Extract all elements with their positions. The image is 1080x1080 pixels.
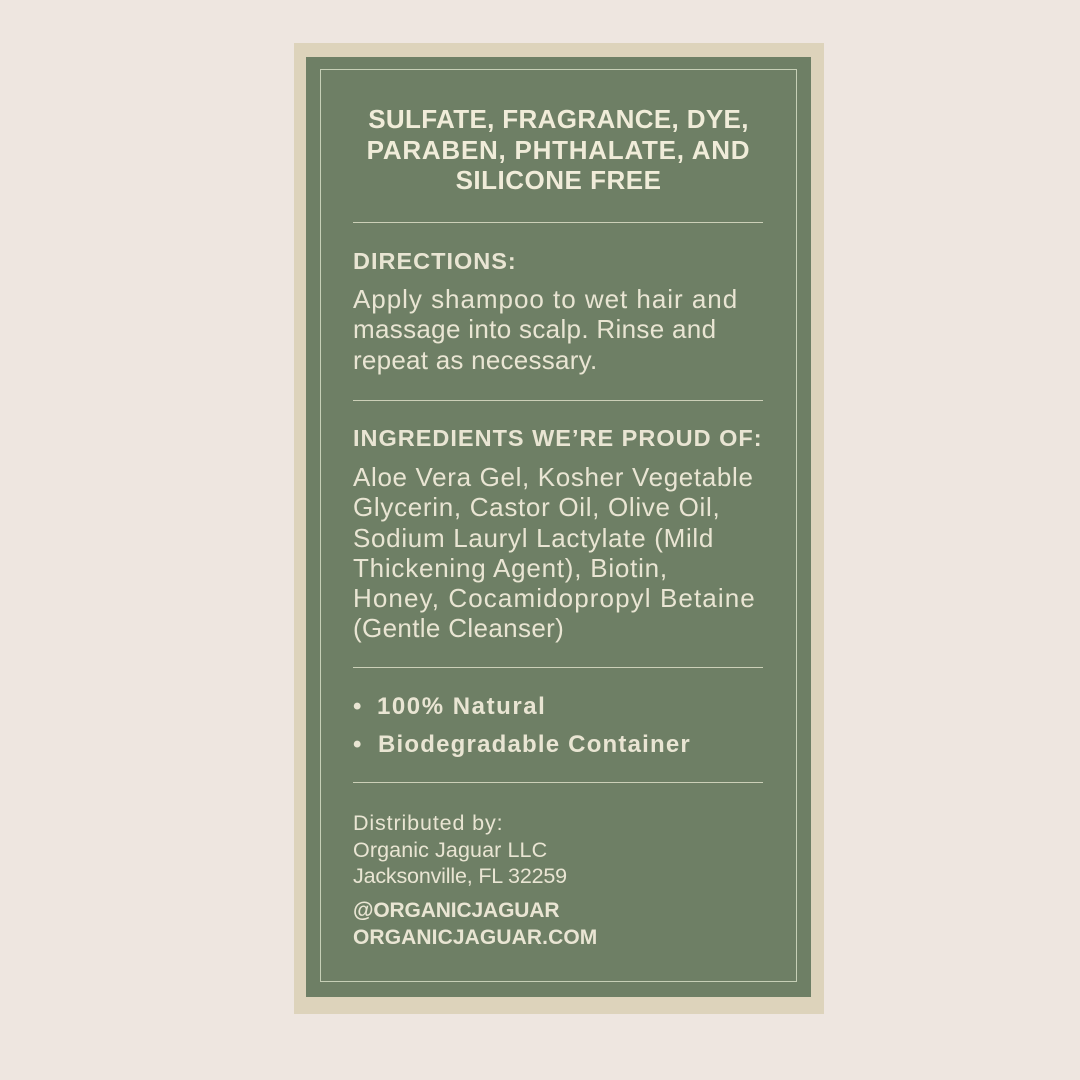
inner border xyxy=(320,69,797,982)
text: directions: Apply shampoo to wet hair and xyxy=(353,284,738,314)
heading: directions: DIRECTIONS: xyxy=(353,248,517,274)
label panel xyxy=(294,43,824,1014)
text: social and website xyxy=(353,899,597,949)
text: ingredients: Glycerin, Castor Oil, Olive Oil, xyxy=(353,492,720,522)
text: ingredients: Sodium Lauryl Lactylate (Mild xyxy=(353,523,714,553)
text: distributor: Organic Jaguar LLC xyxy=(353,838,547,862)
heading: free-from claims: SILICONE FREE xyxy=(456,165,661,195)
text: distributor xyxy=(353,811,567,888)
text: directions xyxy=(353,284,738,375)
text: directions: massage into scalp. Rinse and xyxy=(353,314,716,344)
heading: free-from claims: SULFATE, FRAGRANCE, DYE, xyxy=(368,104,749,134)
text: social and website: ORGANICJAGUAR.COM xyxy=(353,926,597,949)
list: product features xyxy=(353,693,691,758)
text: ingredients: Aloe Vera Gel, Kosher Vegetable xyxy=(353,462,754,492)
text: ingredients xyxy=(353,462,756,643)
heading: ingredients: INGREDIENTS WE’RE PROUD OF: xyxy=(353,425,763,451)
text: distributor: Jacksonville, FL 32259 xyxy=(353,864,567,888)
list: product features: • xyxy=(353,731,361,758)
text: distributor: Distributed by: xyxy=(353,811,503,835)
text: ingredients: (Gentle Cleanser) xyxy=(353,613,564,643)
text: social and website: @ORGANICJAGUAR xyxy=(353,899,559,922)
heading: free-from claims xyxy=(367,104,750,195)
text: ingredients: Thickening Agent), Biotin, xyxy=(353,553,668,583)
text: ingredients: Honey, Cocamidopropyl Betaine xyxy=(353,583,756,613)
text: directions: repeat as necessary. xyxy=(353,345,597,375)
list: product features: Biodegradable Container xyxy=(378,731,691,758)
heading: free-from claims: PARABEN, PHTHALATE, AND xyxy=(367,134,750,164)
list: product features: • xyxy=(353,693,361,720)
list: product features: 100% Natural xyxy=(377,693,546,720)
green panel xyxy=(306,57,811,997)
